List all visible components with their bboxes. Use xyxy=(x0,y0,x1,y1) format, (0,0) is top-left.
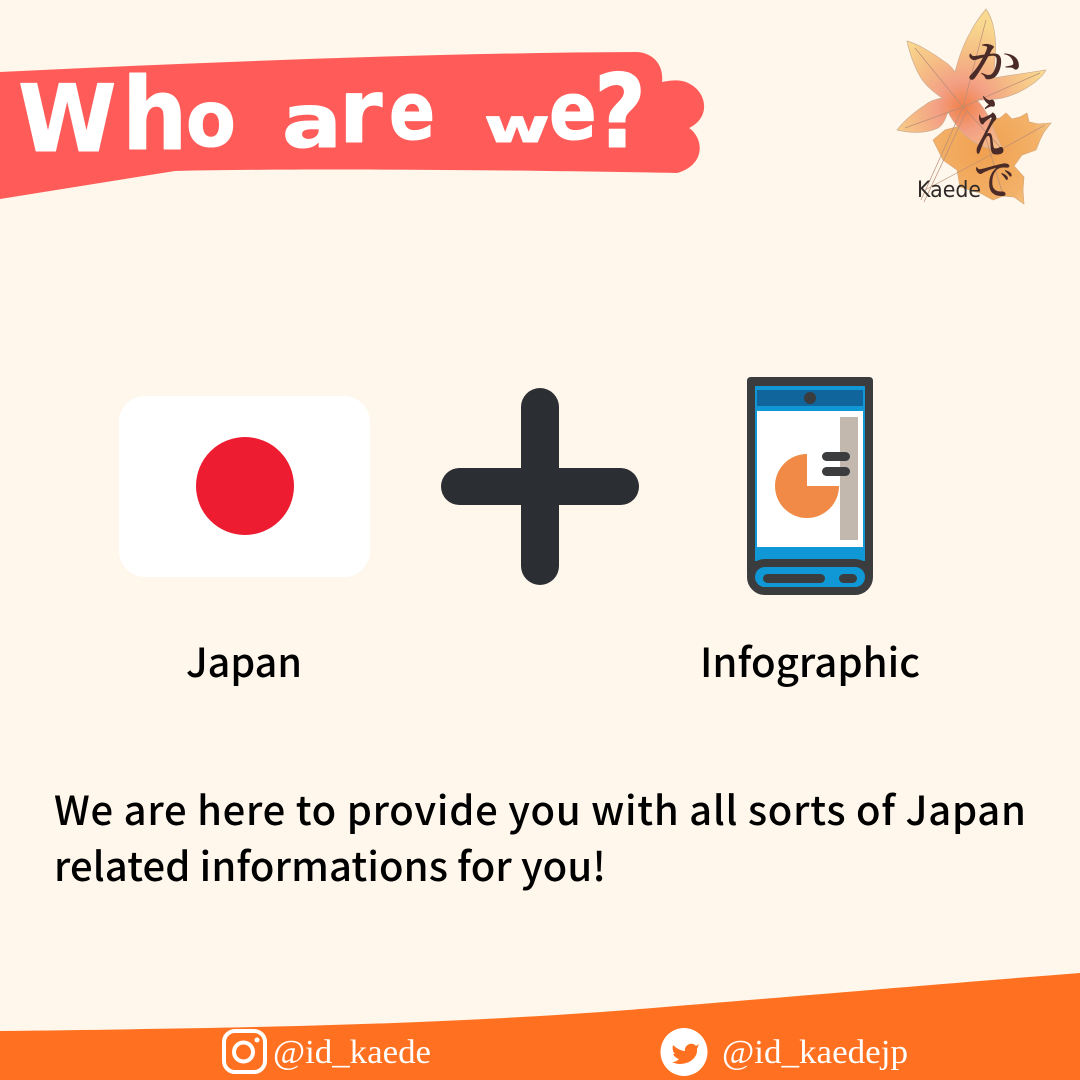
upper peach leaf xyxy=(897,9,1046,150)
label: Infographic: Infographic xyxy=(700,631,920,689)
icon: instagram xyxy=(224,1031,265,1072)
title text: a xyxy=(282,79,342,165)
label: Japan: Japan xyxy=(186,631,302,689)
icon: Japan flag xyxy=(119,396,370,577)
description text: related informations for you! xyxy=(54,835,606,893)
leaf veins xyxy=(905,20,1045,202)
title text: e xyxy=(549,65,597,158)
description text: We are here to provide you with all sorts of Japan xyxy=(54,779,1026,837)
title text: W xyxy=(18,65,116,173)
instagram handle: @id_kaede xyxy=(273,1034,431,1071)
title text xyxy=(18,53,646,173)
icon: plus sign xyxy=(441,388,639,585)
description text xyxy=(54,779,1026,893)
title text: o xyxy=(186,74,236,165)
footer wave xyxy=(0,973,1080,1080)
phone screen xyxy=(757,411,863,547)
instagram handle xyxy=(224,1031,431,1072)
handwritten Japanese name xyxy=(965,27,1022,209)
logo: Kaede maple leaves xyxy=(897,9,1051,209)
lower orange leaf xyxy=(933,113,1051,204)
icon: twitter xyxy=(660,1028,708,1076)
handwritten Japanese name: か xyxy=(965,27,1022,91)
title text: w xyxy=(484,100,550,154)
title banner xyxy=(0,52,704,199)
title text: ? xyxy=(594,53,646,171)
title text: r xyxy=(339,60,383,163)
Kaede wordmark: Kaede xyxy=(917,178,981,203)
title text: e xyxy=(389,65,435,158)
phone header xyxy=(757,390,863,406)
banner shape xyxy=(0,52,704,199)
icon: phone with infographic xyxy=(747,377,873,595)
twitter handle: @id_kaedejp xyxy=(722,1034,908,1071)
handwritten Japanese name: で xyxy=(974,146,1014,209)
phone bottom bar xyxy=(751,563,869,591)
phone body xyxy=(747,377,873,595)
pie chart xyxy=(775,454,839,518)
twitter handle xyxy=(660,1028,908,1076)
handwritten Japanese name: え xyxy=(972,75,1006,172)
title text: h xyxy=(122,56,187,173)
